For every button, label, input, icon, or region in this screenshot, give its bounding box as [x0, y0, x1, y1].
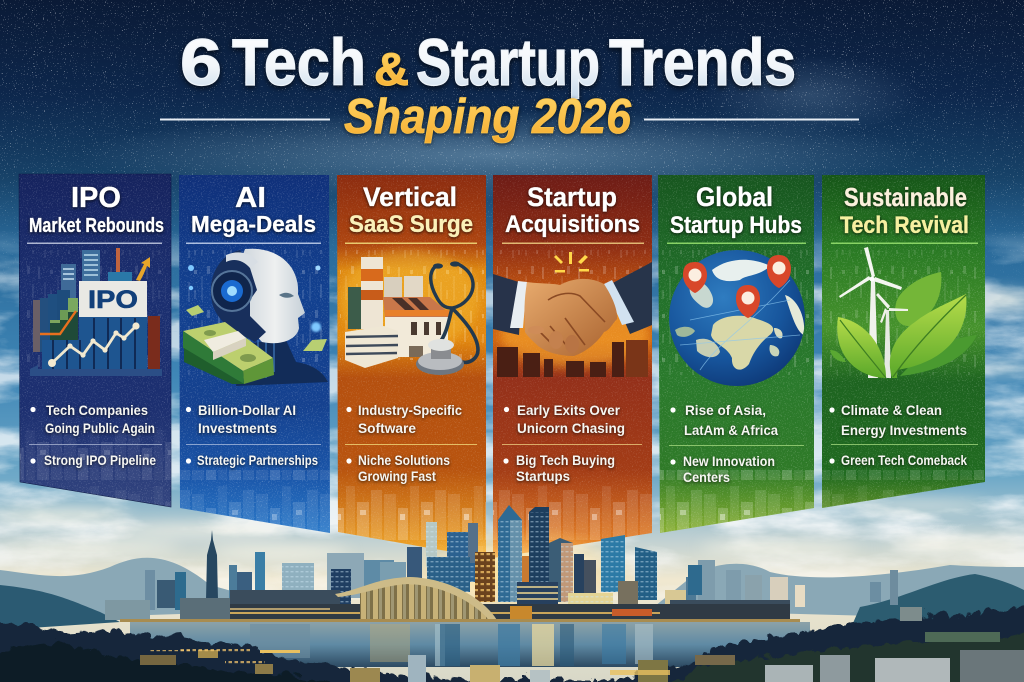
- heading: Market Rebounds: [29, 215, 164, 237]
- bullet list: Billion-Dollar AI: [198, 402, 296, 418]
- title line: 6 Tech & Startup Trends: Trends: [609, 25, 796, 99]
- subtitle: Shaping 2026: Shaping 2026: [344, 90, 632, 144]
- mountains: [0, 558, 1024, 640]
- title line: 6 Tech & Startup Trends: &: [374, 43, 409, 95]
- heading: [29, 182, 164, 237]
- icon: IPO chart: IPO: [88, 286, 138, 314]
- bullet list: [669, 402, 804, 485]
- heading: Startup: [527, 182, 617, 212]
- bullet list: Unicorn Chasing: [517, 420, 625, 436]
- bullet list: [829, 402, 978, 468]
- title line: 6 Tech & Startup Trends: Startup: [416, 25, 600, 99]
- bullet list: Tech Companies: [46, 402, 148, 418]
- waterfront strip: [230, 604, 790, 620]
- icon: factory and stethoscope: [345, 257, 478, 375]
- bullet list: Strong IPO Pipeline: [44, 452, 156, 468]
- skyline buildings: [105, 505, 898, 620]
- icon: leaves and wind turbines: [830, 247, 977, 378]
- heading: [505, 182, 640, 238]
- panel: IPO Market Rebounds: [19, 174, 172, 510]
- bullet list: Early Exits Over: [517, 402, 621, 418]
- panel: AI Mega-Deals: [179, 175, 330, 535]
- heading: SaaS Surge: [349, 211, 473, 238]
- bullet list: New Innovation: [683, 453, 775, 469]
- heading: AI: [235, 182, 266, 214]
- heading: [349, 182, 473, 238]
- heading: [191, 182, 316, 237]
- bullet list: [29, 402, 162, 468]
- panel: Global Startup Hubs: [658, 175, 815, 535]
- bullet list: Climate & Clean: [841, 402, 942, 418]
- title line: 6 Tech & Startup Trends: 6: [180, 25, 222, 99]
- title line: 6 Tech & Startup Trends: [180, 25, 796, 99]
- bullet list: Rise of Asia,: [685, 402, 766, 418]
- lake with reflections: [130, 622, 810, 667]
- bullet list: Software: [358, 420, 416, 436]
- title line: 6 Tech & Startup Trends: Tech: [232, 25, 366, 99]
- heading: IPO: [71, 182, 121, 214]
- bullet list: [502, 402, 642, 484]
- heading: Mega-Deals: [191, 211, 316, 237]
- bullet list: [345, 402, 477, 484]
- bullet list: LatAm & Africa: [684, 422, 778, 438]
- bullet list: Niche Solutions: [358, 452, 450, 468]
- shoreline: [120, 619, 800, 622]
- icon: IPO chart: [30, 248, 162, 376]
- icon: handshake: [493, 252, 652, 377]
- title: [180, 25, 796, 144]
- heading: Global: [696, 182, 773, 212]
- bullet list: Going Public Again: [45, 420, 155, 436]
- bullet list: Startups: [516, 468, 570, 484]
- panel: Startup Acquisitions: [493, 175, 653, 560]
- bullet list: Investments: [198, 420, 277, 436]
- heading: [670, 182, 802, 239]
- heading: Acquisitions: [505, 211, 640, 238]
- heading: Startup Hubs: [670, 212, 802, 239]
- bullet list: Energy Investments: [841, 422, 967, 438]
- bullet list: Growing Fast: [358, 468, 436, 484]
- heading: Vertical: [363, 182, 457, 212]
- bullet list: Industry-Specific: [358, 402, 462, 418]
- forest and foreground neighbourhood: [0, 600, 1024, 682]
- heading: Sustainable: [844, 182, 967, 212]
- heading: [840, 182, 969, 239]
- bullet list: Green Tech Comeback: [841, 452, 967, 468]
- panel: Sustainable Tech Revival: [822, 175, 986, 510]
- city skyline and waterfront: [0, 505, 1024, 682]
- arched building: [335, 577, 497, 620]
- bullet list: Strategic Partnerships: [197, 452, 318, 468]
- icon: globe with pins: [669, 250, 805, 386]
- bullet list: Centers: [683, 469, 730, 485]
- bullet list: Big Tech Buying: [516, 452, 615, 468]
- heading: Tech Revival: [840, 212, 969, 239]
- icon: robot head with cash: [183, 249, 328, 386]
- bullet list: [186, 402, 321, 468]
- panel: Vertical SaaS Surge: [337, 175, 487, 560]
